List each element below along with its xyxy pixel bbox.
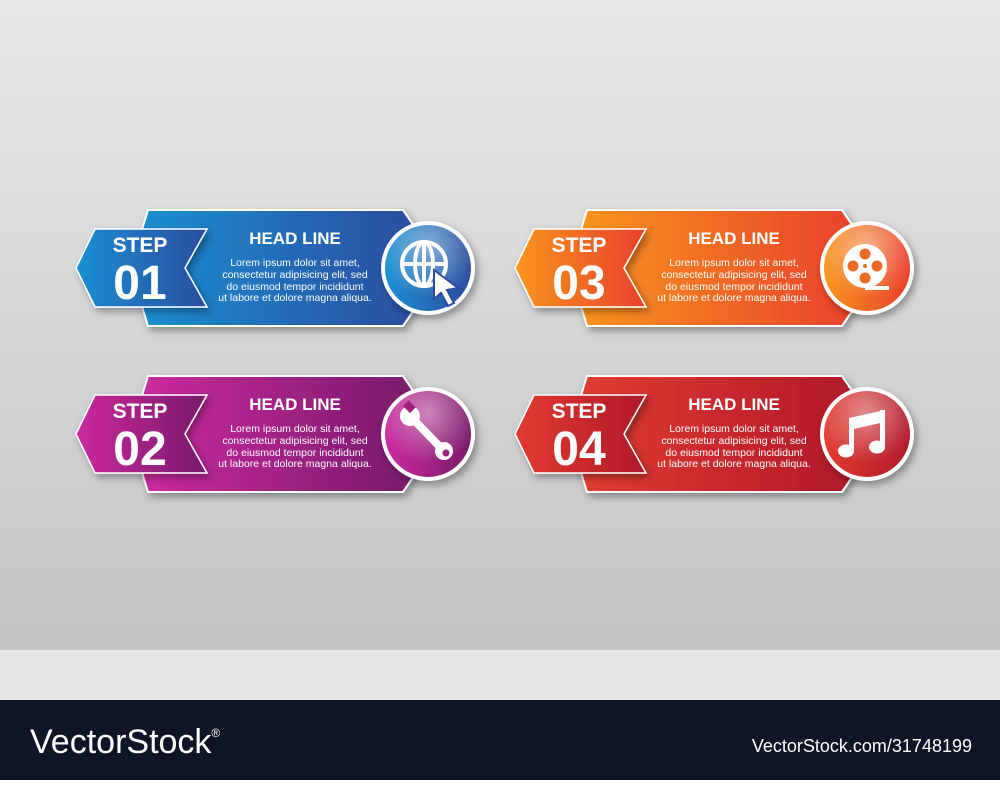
text block xyxy=(657,395,811,470)
step label: 02 xyxy=(113,423,167,476)
step label xyxy=(113,234,167,310)
step tag xyxy=(515,229,646,307)
main band xyxy=(579,210,857,326)
text block: do eiusmod tempor incididunt xyxy=(226,281,364,293)
text block: Lorem ipsum dolor sit amet, xyxy=(669,257,799,269)
icon: music note xyxy=(820,387,914,481)
icon: film reel xyxy=(820,221,914,315)
step label: 04 xyxy=(552,423,606,476)
text block: HEAD LINE xyxy=(249,395,341,414)
text block xyxy=(657,229,811,304)
text block: ut labore et dolore magna aliqua. xyxy=(218,458,372,470)
text block: Lorem ipsum dolor sit amet, xyxy=(230,257,360,269)
step label: STEP xyxy=(552,400,606,423)
text block: do eiusmod tempor incididunt xyxy=(226,447,364,459)
text block: consectetur adipisicing elit, sed xyxy=(222,435,368,447)
text block: consectetur adipisicing elit, sed xyxy=(222,269,368,281)
text block: Lorem ipsum dolor sit amet, xyxy=(669,423,799,435)
step label: 01 xyxy=(113,257,167,310)
main band xyxy=(140,210,418,326)
panel: step 01 xyxy=(76,210,475,326)
main band xyxy=(140,376,418,492)
panel: step 02 xyxy=(76,376,475,492)
panel: step 03 xyxy=(515,210,914,326)
text block: ut labore et dolore magna aliqua. xyxy=(218,292,372,304)
step tag xyxy=(76,229,207,307)
logo: ® xyxy=(211,726,220,740)
step label xyxy=(552,234,606,310)
image id: VectorStock.com/31748199 xyxy=(752,736,972,756)
icon: wrench xyxy=(381,387,475,481)
step label xyxy=(113,400,167,476)
footer bar xyxy=(0,700,1000,780)
text block: consectetur adipisicing elit, sed xyxy=(661,435,807,447)
text block: HEAD LINE xyxy=(688,229,780,248)
text block: HEAD LINE xyxy=(688,395,780,414)
text block: do eiusmod tempor incididunt xyxy=(665,281,803,293)
text block xyxy=(218,395,372,470)
text block: HEAD LINE xyxy=(249,229,341,248)
text block: do eiusmod tempor incididunt xyxy=(665,447,803,459)
step label: STEP xyxy=(113,234,167,257)
logo: VectorStock xyxy=(30,723,211,761)
step label: STEP xyxy=(552,234,606,257)
step tag xyxy=(515,395,646,473)
text block: ut labore et dolore magna aliqua. xyxy=(657,458,811,470)
text block xyxy=(218,229,372,304)
step label: 03 xyxy=(552,257,606,310)
step tag xyxy=(76,395,207,473)
text block: ut labore et dolore magna aliqua. xyxy=(657,292,811,304)
main band xyxy=(579,376,857,492)
icon: globe with cursor xyxy=(381,221,475,315)
text block: consectetur adipisicing elit, sed xyxy=(661,269,807,281)
step label xyxy=(552,400,606,476)
panel: step 04 xyxy=(515,376,914,492)
step label: STEP xyxy=(113,400,167,423)
text block: Lorem ipsum dolor sit amet, xyxy=(230,423,360,435)
